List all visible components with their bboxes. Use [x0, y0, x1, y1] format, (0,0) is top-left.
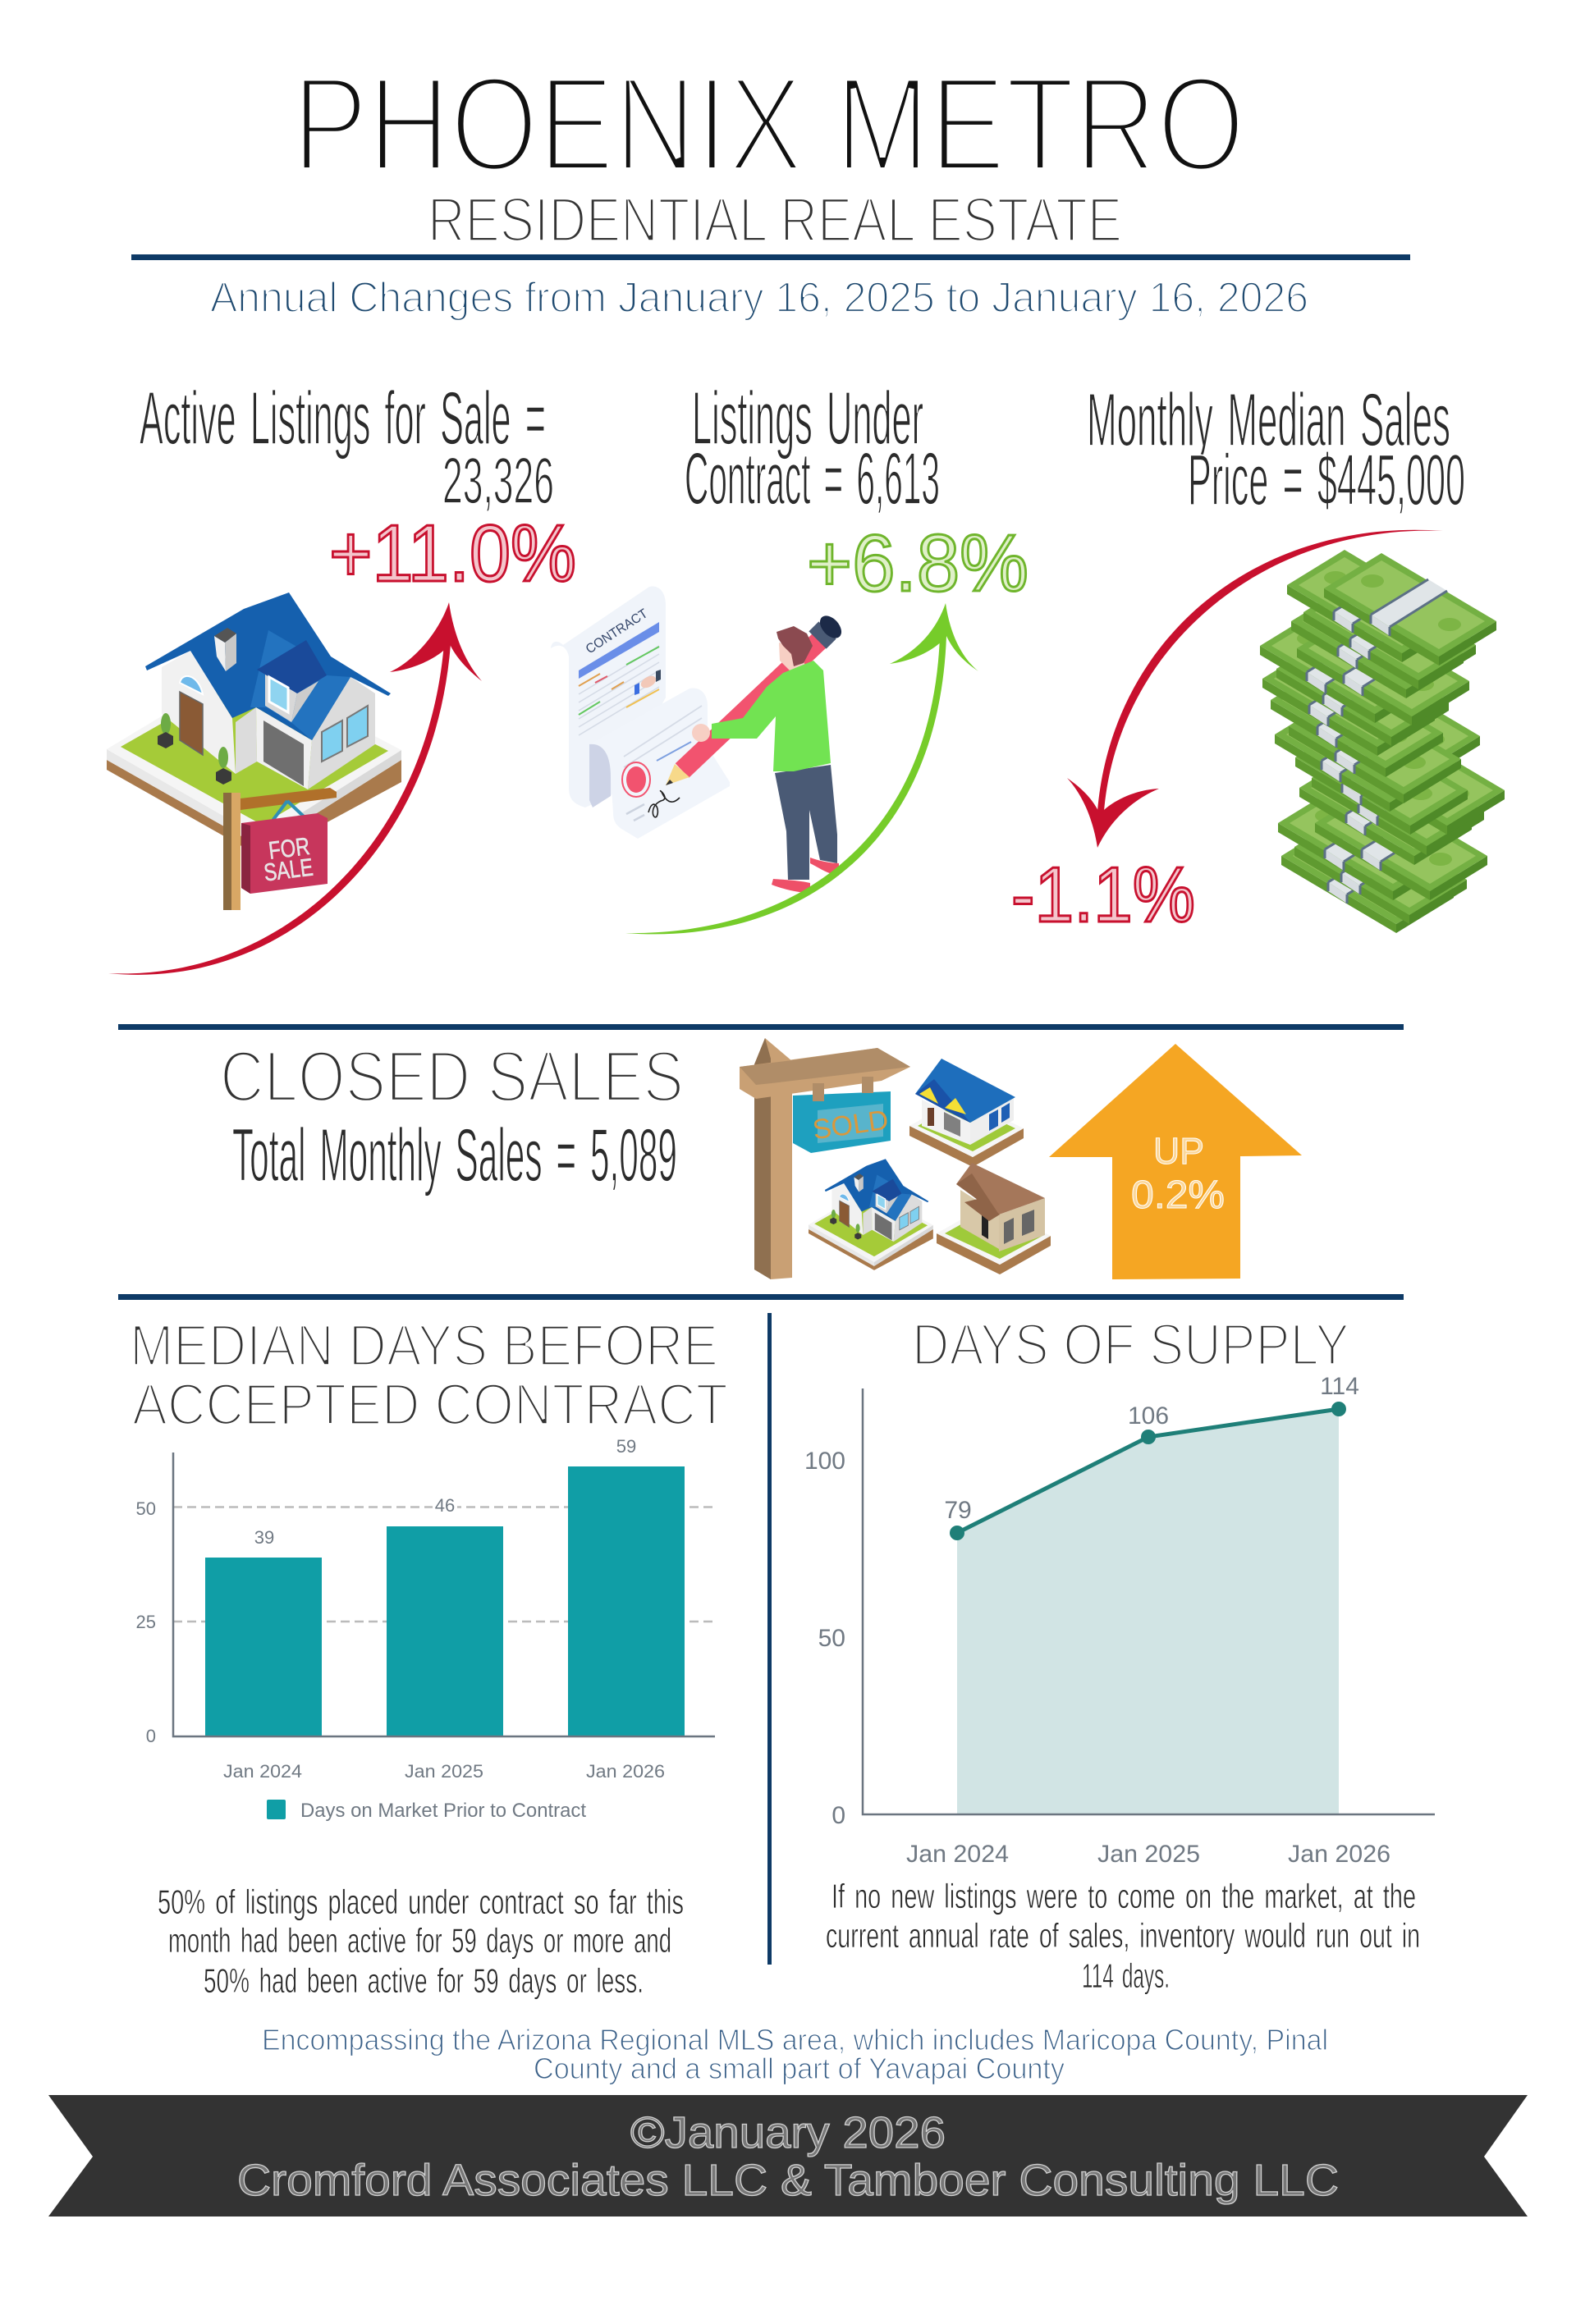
- median days note: [158, 1883, 684, 2000]
- area chart: 0: [832, 1802, 845, 1829]
- median days heading: ACCEPTED CONTRACT: [132, 1373, 728, 1438]
- bar chart: 46: [435, 1495, 455, 1516]
- active listings label: [140, 377, 554, 517]
- panel: median sales price: [1011, 378, 1505, 939]
- title: PHOENIX METRO: [292, 48, 1245, 199]
- bar chart: [136, 1436, 715, 1822]
- median price label: [1087, 378, 1465, 520]
- up percentage: 0.2%: [1131, 1173, 1225, 1217]
- area chart: 79: [944, 1497, 972, 1524]
- bar chart: 39: [254, 1527, 274, 1548]
- days of supply note: 114 days.: [1082, 1956, 1170, 1995]
- area chart: Jan 2024: [906, 1841, 1009, 1868]
- icon: blue house B: [809, 1159, 933, 1270]
- icon: brown house C: [937, 1163, 1051, 1274]
- under contract label: Listings Under: [692, 377, 923, 460]
- median days heading: [130, 1314, 728, 1438]
- for sale sign: FOR: [267, 833, 311, 865]
- area chart: 114: [1320, 1373, 1359, 1400]
- panel: active listings: [107, 377, 576, 975]
- bar chart: 0: [146, 1726, 156, 1746]
- icon: stack of money: [1260, 550, 1505, 933]
- median price change: -1.1%: [1011, 851, 1195, 939]
- panel: closed sales: Total Monthly Sales = 5,089: [232, 1114, 677, 1197]
- median days note: 50% had been active for 59 days or less.: [204, 1961, 644, 2000]
- bar chart: 50: [136, 1498, 156, 1519]
- panel: closed sales: [220, 1036, 1302, 1279]
- median days note: 50% of listings placed under contract so far this: [158, 1883, 684, 1921]
- panel: under contract: [551, 377, 1029, 934]
- bar chart: Jan 2026: [586, 1761, 665, 1782]
- coverage note: [262, 2023, 1328, 2085]
- panel: median days: [130, 1314, 728, 2000]
- under contract change: +6.8%: [807, 518, 1029, 608]
- icon: sold sign: [740, 1038, 910, 1279]
- arrow: red down: [1067, 530, 1443, 848]
- under contract label: [685, 377, 940, 520]
- median days heading: MEDIAN DAYS BEFORE: [130, 1314, 718, 1379]
- area chart: Jan 2025: [1097, 1841, 1200, 1868]
- up label: UP: [1153, 1130, 1204, 1172]
- icon: house for sale: [107, 592, 401, 910]
- chart legend: Days on Market Prior to Contract: [300, 1800, 586, 1822]
- area chart: 50: [818, 1625, 845, 1652]
- bar chart: Jan 2025: [405, 1761, 483, 1782]
- icon: blue house A: [909, 1059, 1024, 1167]
- panel: active listings: Active Listings for Sale =: [140, 377, 546, 460]
- arrow: green up: [625, 603, 978, 934]
- panel: under contract: Contract = 6,613: [685, 438, 940, 520]
- closed sales heading: CLOSED SALES: [220, 1036, 684, 1117]
- bar chart: Jan 2024: [223, 1761, 302, 1782]
- bar chart: 25: [136, 1612, 156, 1632]
- date range subheading: Annual Changes from January 16, 2025 to January 16, 2026: [210, 274, 1308, 322]
- icon: contract documents: [551, 586, 730, 839]
- area chart: 100: [804, 1448, 845, 1475]
- for sale sign: SALE: [263, 854, 314, 887]
- copyright holders: Cromford Associates LLC & Tamboer Consulting LLC: [237, 2156, 1339, 2205]
- footer banner: [48, 2095, 1528, 2216]
- area chart: [804, 1373, 1435, 1868]
- panel: days of supply: [804, 1313, 1435, 1995]
- active listings change: +11.0%: [329, 508, 576, 598]
- area chart: Jan 2026: [1288, 1841, 1390, 1868]
- median days note: month had been active for 59 days or more and: [168, 1921, 671, 1960]
- days of supply heading: DAYS OF SUPPLY: [912, 1313, 1349, 1378]
- for sale sign: [223, 788, 337, 910]
- arrow: red up: [108, 602, 482, 975]
- icon: contract documents: CONTRACT: [584, 606, 650, 656]
- arrow: orange up with percentage: [1049, 1044, 1302, 1279]
- coverage note: Encompassing the Arizona Regional MLS area, which includes Maricopa County, Pinal: [262, 2023, 1328, 2056]
- copyright date: ©January 2026: [630, 2108, 946, 2157]
- area chart: 106: [1128, 1402, 1169, 1430]
- days of supply note: [826, 1877, 1420, 1995]
- coverage note: County and a small part of Yavapai County: [534, 2052, 1065, 2085]
- subtitle: RESIDENTIAL REAL ESTATE: [428, 185, 1122, 255]
- bar chart: 59: [616, 1436, 636, 1457]
- icon: person with pencil: [666, 611, 845, 893]
- icon: sold sign: SOLD: [811, 1105, 891, 1146]
- active listings label: 23,326: [442, 444, 554, 517]
